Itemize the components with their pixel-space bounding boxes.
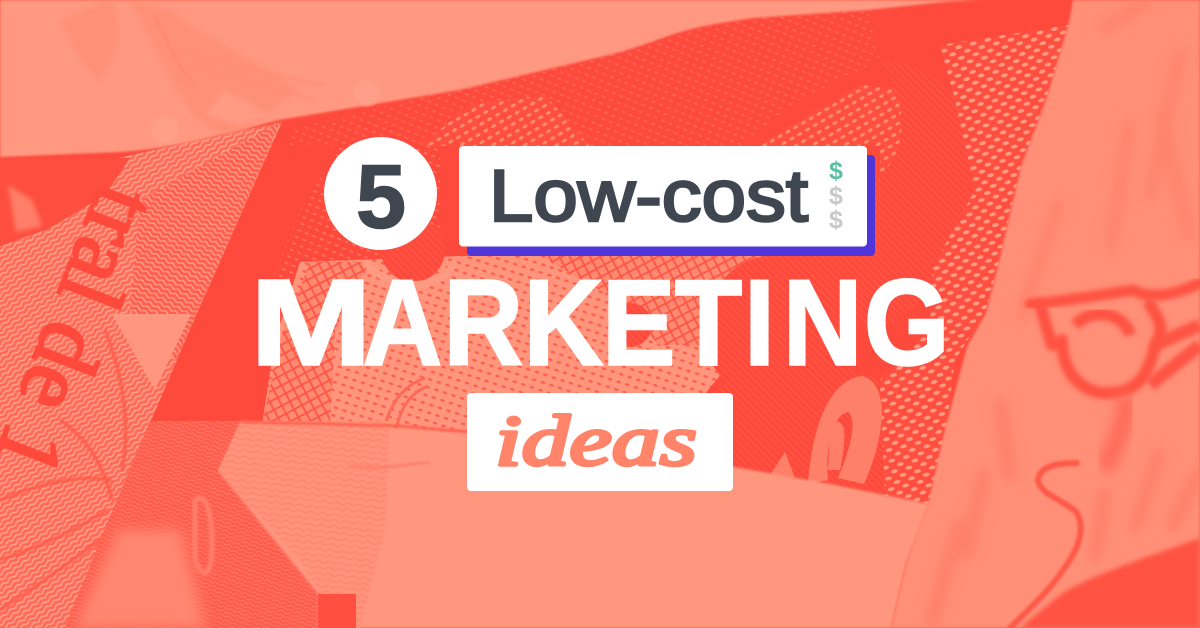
banknote: lower-left textured chunk	[65, 421, 318, 628]
banknote: top folded note	[0, 0, 985, 157]
banknote: central halftone portrait	[262, 218, 770, 470]
low-cost label	[459, 146, 875, 256]
ideas label	[467, 393, 733, 491]
number 5: 5	[356, 148, 406, 248]
low-cost text: Low-cost	[489, 156, 808, 237]
ideas text: ideas	[495, 401, 697, 481]
label shadow	[467, 155, 875, 256]
banknote: upper engraved dots	[268, 10, 925, 290]
dollar rating icons: $	[829, 182, 843, 210]
banknote: right blurred note with portrait	[891, 0, 1200, 628]
number badge	[324, 137, 437, 250]
banknote: swirl above right	[780, 60, 985, 330]
banknote: right diamond mesh	[700, 25, 1069, 504]
marketing heading: M	[250, 254, 372, 391]
banknote: bottom folded note	[218, 421, 929, 628]
dollar rating icons: $	[829, 206, 843, 234]
banknote: left striped panel	[0, 122, 282, 628]
ideas card	[467, 393, 733, 491]
dollar rating icons	[829, 157, 843, 234]
marketing heading: ARKETING	[363, 254, 949, 391]
badge circle	[324, 137, 437, 250]
banknote: red swirl beside the G	[705, 255, 845, 405]
label card	[459, 146, 867, 246]
banknote: heart-shaped ornament	[770, 376, 882, 484]
dollar rating icons: $	[829, 157, 843, 185]
